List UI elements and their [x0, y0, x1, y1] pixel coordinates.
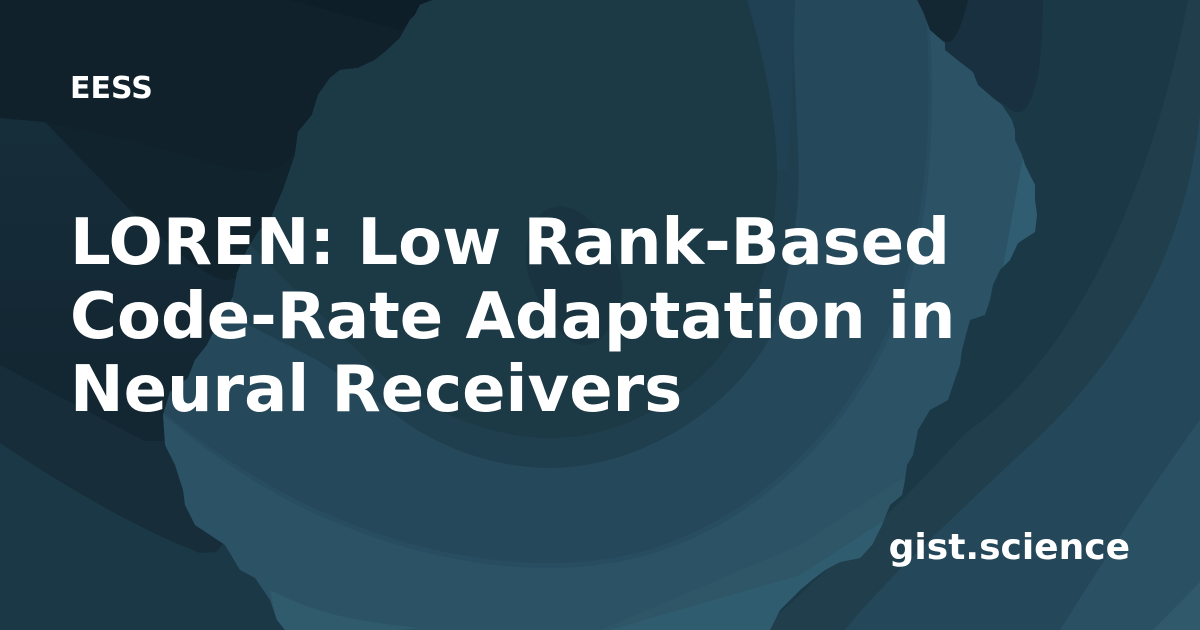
category label: EESS	[70, 71, 153, 106]
title: LOREN: Low Rank-Based	[70, 206, 950, 280]
title	[70, 206, 955, 427]
title: Neural Receivers	[70, 353, 682, 427]
brand: gist.science	[889, 527, 1130, 568]
title: Code-Rate Adaptation in	[70, 280, 955, 354]
central blob with concentric rings	[163, 0, 1037, 630]
